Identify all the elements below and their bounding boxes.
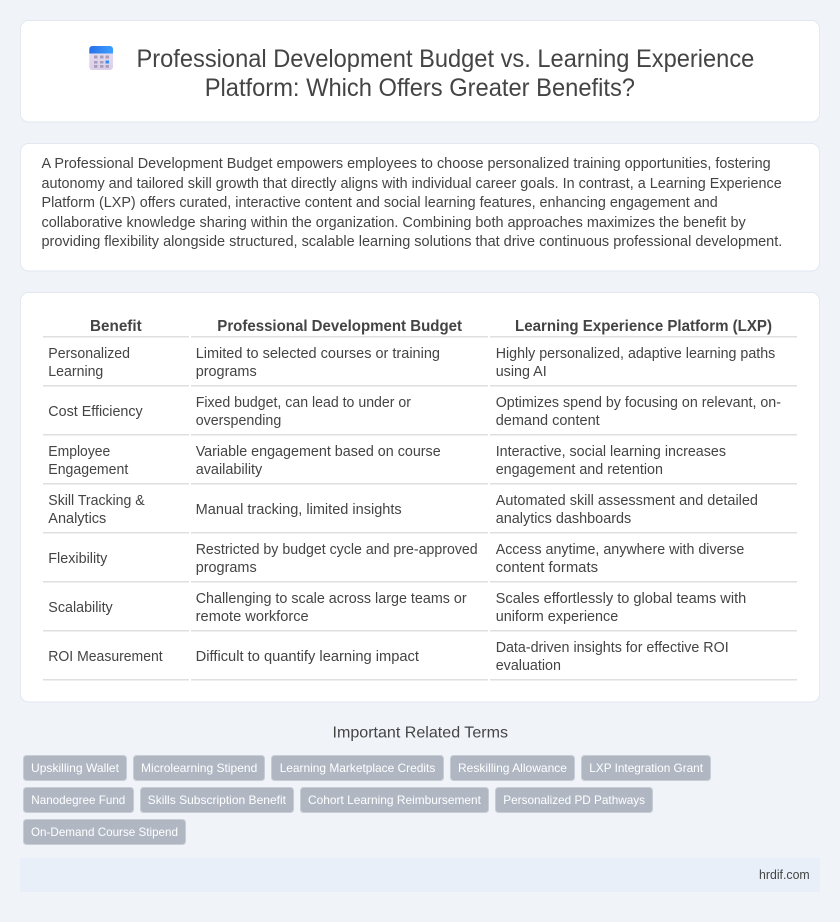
table header row: Learning Experience Platform (LXP) [515,318,772,335]
row: cost efficiency: Cost Efficiency [48,404,143,420]
row: scalability [43,591,797,632]
row: roi measurement: evaluation [496,658,561,674]
row: cost efficiency: Optimizes spend by focusing on relevant, on- [496,395,781,411]
row: roi measurement: Difficult to quantify learning impact [196,649,419,665]
tag: personalized pd pathways [496,788,652,812]
panel: introduction text: A Professional Development Budget empowers employees to choose personalized training opportunities, fostering [42,156,771,172]
row: skill tracking and analytics [43,493,797,534]
row: employee engagement: Engagement [48,462,128,478]
row: personalized learning [43,346,797,386]
row: skill tracking and analytics: analytics dashboards [496,511,631,527]
row: scalability: Challenging to scale across large teams or [196,591,467,607]
row: skill tracking and analytics: Automated skill assessment and detailed [496,493,758,509]
row: flexibility: programs [196,560,257,576]
panel: introduction text: providing flexibility alongside structured, scalable learning solutions that drive continuous professional development. [42,234,782,250]
panel: comparison table [20,292,820,702]
row: employee engagement: Variable engagement based on course [196,444,441,460]
row: personalized learning: Limited to selected courses or training [196,346,440,362]
tag: on-demand course stipend: On-Demand Course Stipend [31,825,178,839]
row: employee engagement: availability [196,462,263,478]
row: cost efficiency: Fixed budget, can lead to under or [196,395,411,411]
panel: introduction text: collaborative knowledge sharing within the organization. Combining both approaches maximizes the benefit by [42,215,746,231]
footer: hrdif.com [759,867,810,882]
row: flexibility: content formats [496,560,598,576]
related term tags [24,756,710,844]
row: personalized learning: programs [196,364,257,380]
row: roi measurement: Data-driven insights for effective ROI [496,640,729,656]
row: employee engagement: Employee [48,444,110,460]
row: skill tracking and analytics: Analytics [48,511,106,527]
tag: upskilling wallet: Upskilling Wallet [31,761,120,775]
tag: microlearning stipend: Microlearning Stipend [141,761,257,775]
row: scalability: Scalability [48,600,113,616]
row: skill tracking and analytics: Skill Tracking & [48,493,145,509]
panel: header [20,20,820,122]
title [136,45,754,102]
panel: introduction text [20,144,820,271]
row: cost efficiency [43,395,797,436]
tag: microlearning stipend [134,756,264,780]
tag: lxp integration grant [582,756,710,780]
row: personalized learning: Personalized [48,346,130,362]
row: personalized learning: Highly personalized, adaptive learning paths [496,346,775,362]
icon: calendar [89,46,113,70]
heading: important related terms: Important Related Terms [332,724,508,742]
footer [20,858,820,892]
tag: nanodegree fund: Nanodegree Fund [31,793,125,807]
table header row: Professional Development Budget [217,318,463,335]
table header row [43,318,797,338]
row: flexibility [43,542,797,582]
tag: upskilling wallet [24,756,126,780]
row: cost efficiency: overspending [196,413,281,429]
tag: on-demand course stipend [24,820,186,844]
row: flexibility: Flexibility [48,551,108,567]
tag: lxp integration grant: LXP Integration Grant [589,761,704,775]
row: skill tracking and analytics: Manual tracking, limited insights [196,502,402,518]
panel: introduction text: autonomy and tailored skill growth that directly aligns with individual career goals. In contrast, a Learning Experience [42,176,782,192]
tag: cohort learning reimbursement [300,788,488,812]
title: Platform: Which Offers Greater Benefits? [205,74,635,102]
row: roi measurement [43,640,797,680]
row: roi measurement: ROI Measurement [48,649,163,665]
row: flexibility: Restricted by budget cycle and pre-approved [196,542,478,558]
row: personalized learning: Learning [48,364,103,380]
row: scalability: remote workforce [196,609,309,625]
tag: skills subscription benefit [140,788,294,812]
row: employee engagement: engagement and retention [496,462,663,478]
tag: nanodegree fund [24,788,134,812]
panel: introduction text: Platform (LXP) offers curated, interactive content and social learning features, enhancing engagement and [42,195,718,211]
tag: reskilling allowance: Reskilling Allowance [458,761,567,775]
row: flexibility: Access anytime, anywhere with diverse [496,542,744,558]
row: scalability: Scales effortlessly to global teams with [496,591,746,607]
row: personalized learning: using AI [496,364,547,380]
tag: learning marketplace credits [272,756,444,780]
title: Professional Development Budget vs. Learning Experience [136,45,754,73]
tag: skills subscription benefit: Skills Subscription Benefit [148,793,287,807]
row: employee engagement [43,444,797,484]
tag: cohort learning reimbursement: Cohort Learning Reimbursement [308,793,482,807]
tag: reskilling allowance [450,756,574,780]
table header row: Benefit [90,318,142,335]
tag: learning marketplace credits: Learning Marketplace Credits [280,761,435,775]
tag: personalized pd pathways: Personalized PD Pathways [503,793,645,807]
row: cost efficiency: demand content [496,413,600,429]
row: employee engagement: Interactive, social learning increases [496,444,726,460]
row: scalability: uniform experience [496,609,618,625]
